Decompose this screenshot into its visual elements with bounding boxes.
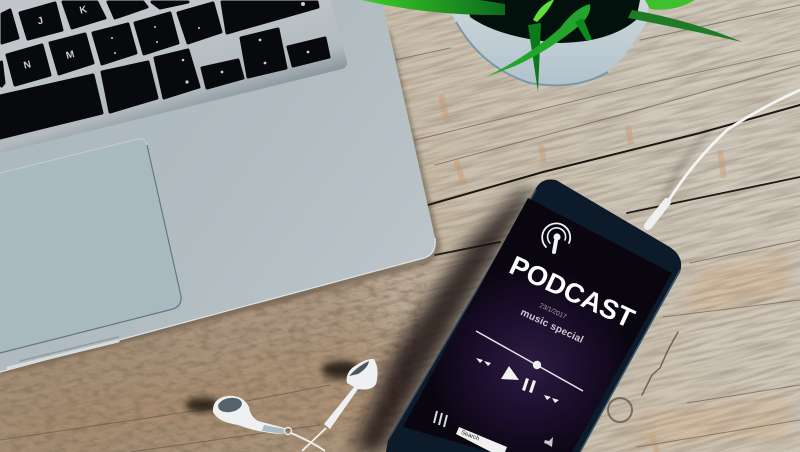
wood knot: [608, 398, 632, 422]
phone screen: [403, 198, 672, 452]
smartphone: [386, 179, 681, 452]
search button: [456, 427, 507, 452]
podcast icon: [542, 223, 570, 252]
keyboard recess: [0, 0, 347, 153]
plant leaves: [362, 0, 742, 92]
key labels: K: [79, 4, 89, 17]
player controls: [476, 358, 559, 403]
laptop shadow on desk: [0, 30, 442, 375]
left earbud: [213, 396, 292, 434]
plant pot: [362, 0, 742, 92]
search button: Search: [460, 430, 480, 442]
phone shadow on desk: [352, 190, 535, 452]
earbud cables: [291, 428, 326, 451]
key labels: [23, 2, 309, 84]
episode name: music special: [519, 307, 585, 346]
laptop body: [0, 0, 435, 372]
equalizer icon: [434, 411, 447, 427]
front lip notch: [8, 337, 118, 368]
key labels: M: [65, 49, 76, 62]
trackpad: [0, 139, 181, 353]
progress slider: [476, 331, 583, 391]
headphone cable and jack: [648, 90, 800, 226]
volume icon: [544, 437, 553, 447]
podcast title: PODCAST: [505, 250, 640, 334]
keyboard keys: [0, 2, 329, 138]
key labels: J: [36, 15, 44, 27]
key labels: N: [23, 59, 32, 72]
date: 23/1/2017: [538, 302, 568, 321]
earbud shadows: [185, 361, 362, 412]
soil: [467, 0, 640, 43]
cable shadow: [660, 130, 710, 215]
right earbud: [324, 359, 378, 429]
